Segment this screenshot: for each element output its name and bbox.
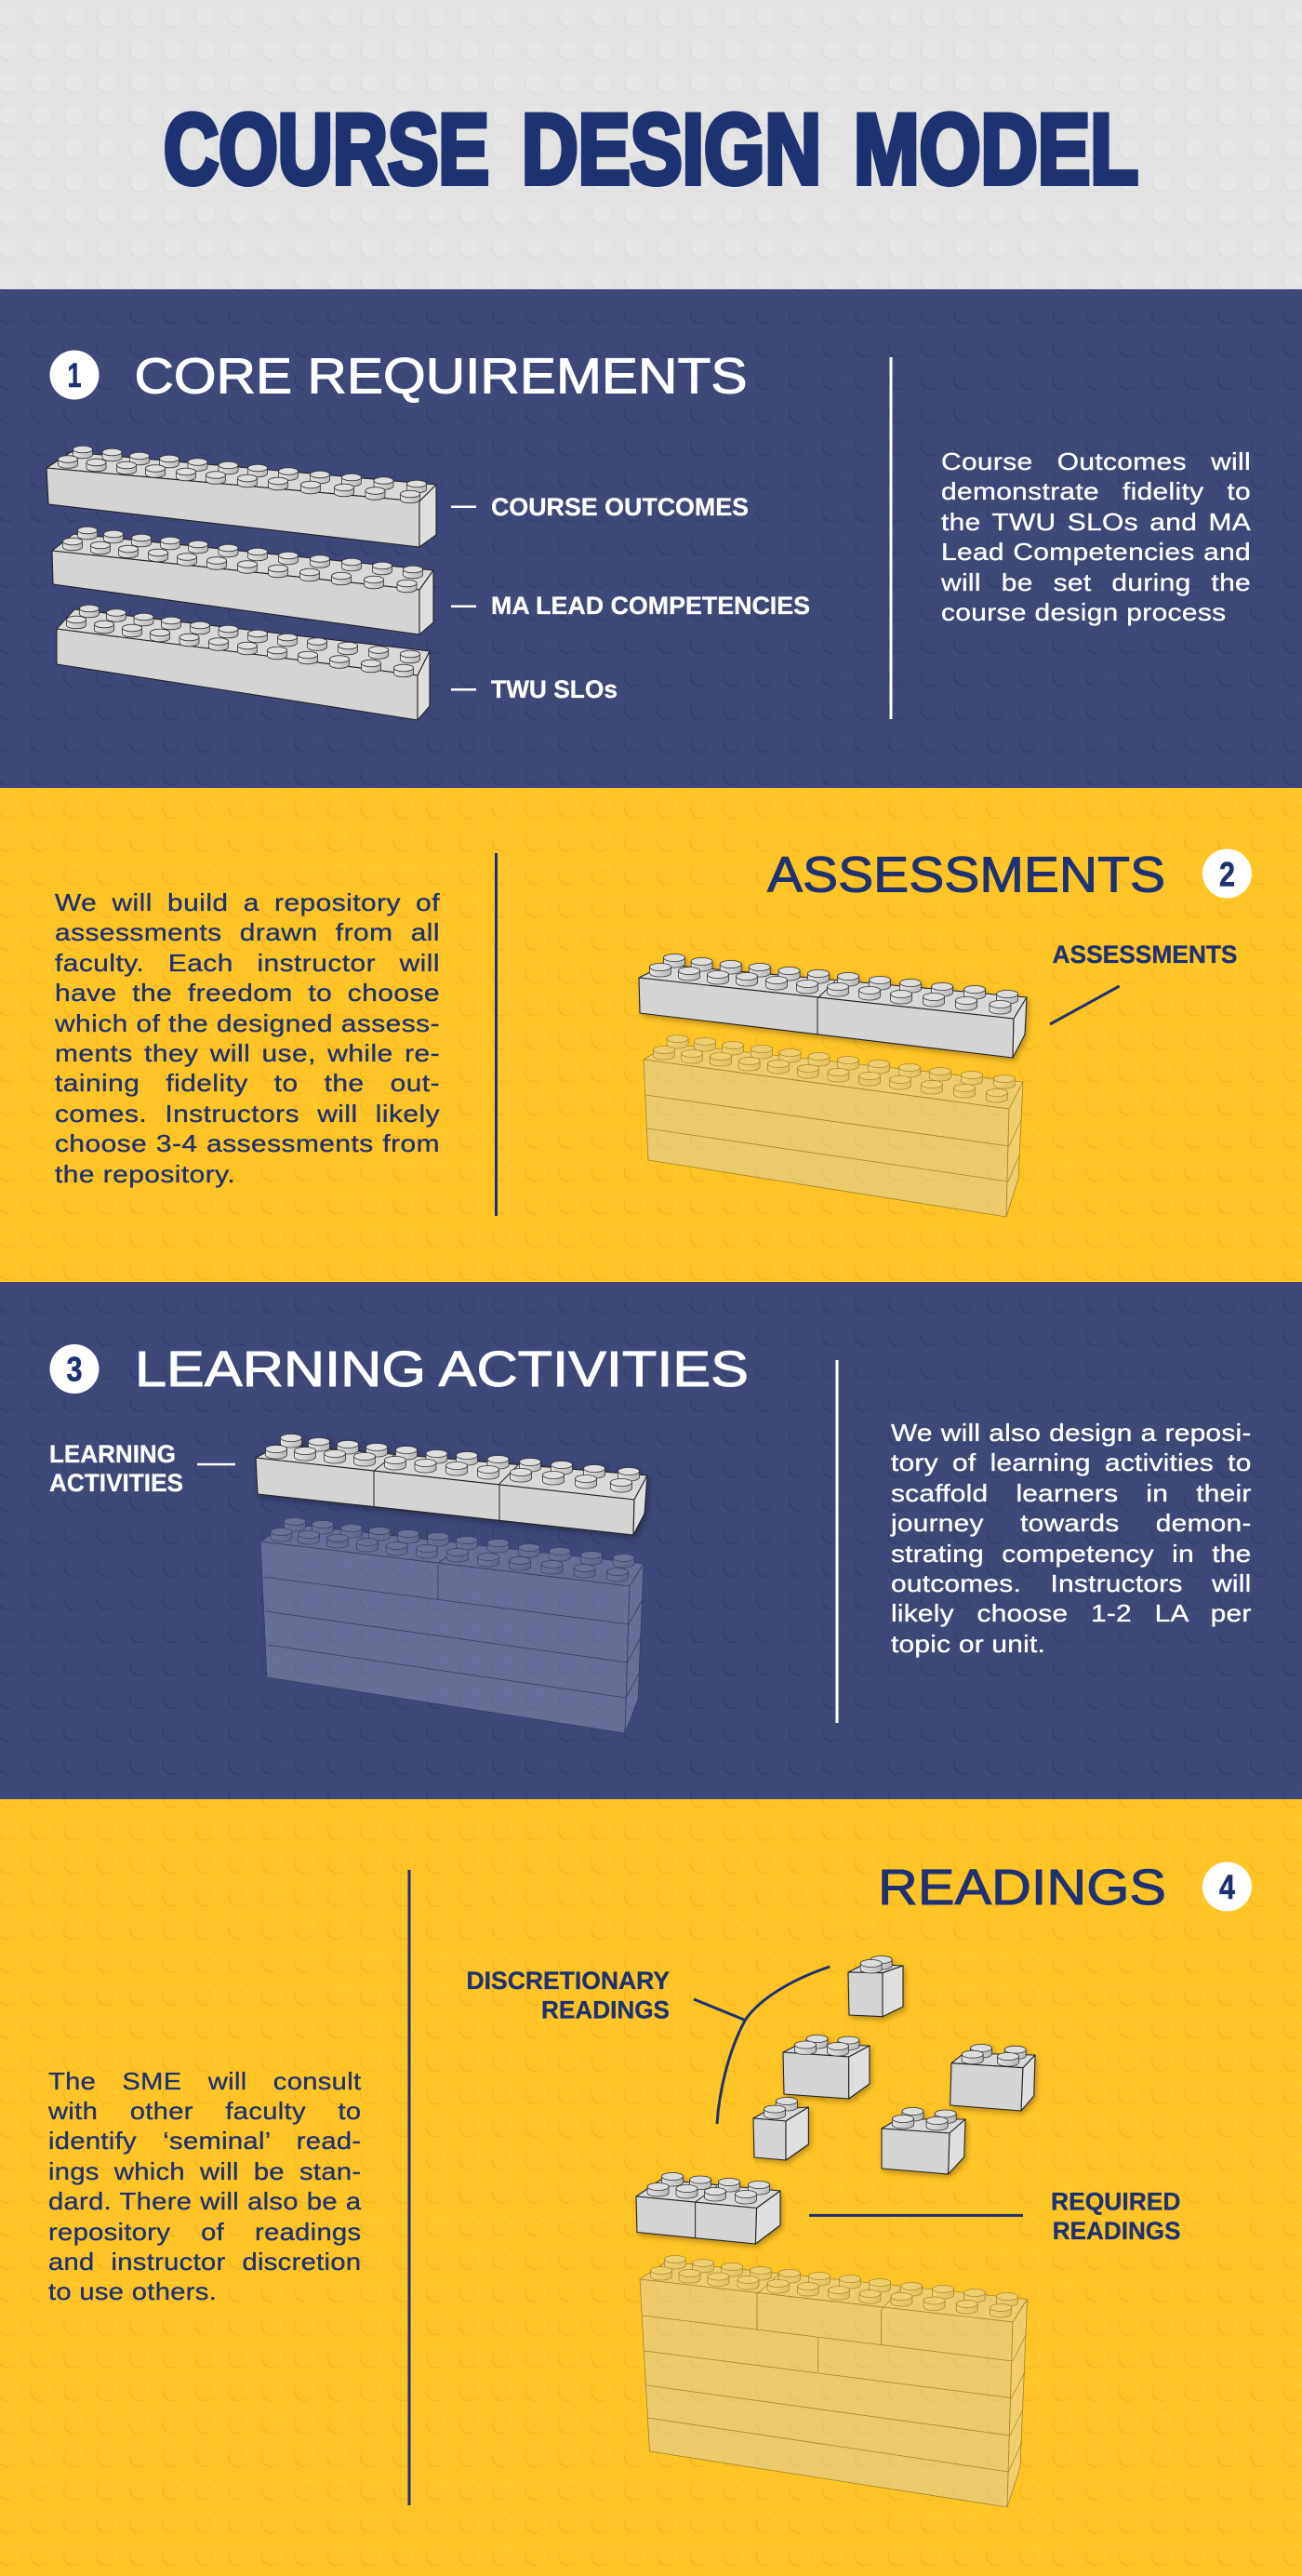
text block: assessments description: choose 3-4 assessments from — [55, 1129, 440, 1157]
ghost brick stack — [644, 1034, 1023, 1217]
text block: readings description: to use others. — [48, 2277, 217, 2305]
heading: readings: READINGS — [878, 1860, 1166, 1915]
title: MODEL — [854, 93, 1138, 205]
divider — [835, 1360, 839, 1723]
text block: assessments description: comes. Instructors will likely — [55, 1100, 440, 1128]
brick: discretionary 1 — [848, 1955, 903, 2017]
text block: assessments description: taining fidelity to the out- — [55, 1069, 440, 1097]
number badge 1: 1 — [67, 356, 82, 394]
ghost brick wall — [640, 2255, 1027, 2507]
text block: learning activities description: topic or unit. — [891, 1630, 1045, 1658]
text block: readings description — [48, 2067, 361, 2305]
text block: assessments description: faculty. Each instructor will — [55, 949, 440, 977]
panel: readings — [0, 1799, 1302, 2566]
divider — [889, 357, 893, 719]
bracket curve: discretionary readings — [717, 1967, 830, 2124]
number badge 4: 4 — [1219, 1868, 1235, 1906]
text block: learning activities description — [890, 1419, 1252, 1658]
brick: discretionary 3 — [950, 2045, 1035, 2111]
panel: title banner — [0, 0, 1302, 289]
label: learning activities: ACTIVITIES — [49, 1469, 183, 1497]
label: discretionary readings: READINGS — [541, 1996, 670, 2024]
divider — [495, 853, 498, 1216]
label: course outcomes: COURSE OUTCOMES — [491, 493, 749, 521]
label: learning activities — [49, 1440, 235, 1497]
text block: assessments description: which of the designed assess- — [55, 1009, 440, 1037]
text block: readings description: ings which will be stan- — [48, 2157, 361, 2185]
number badge 4 — [1202, 1862, 1252, 1911]
title — [164, 93, 1138, 205]
panel: learning activities — [0, 1282, 1302, 1799]
number badge 1 — [50, 350, 99, 400]
number badge 2: 2 — [1219, 856, 1235, 893]
text block: readings description: and instructor discretion — [48, 2248, 361, 2276]
brick: assessments — [639, 954, 1027, 1058]
text block: learning activities description: We will also design a reposi- — [891, 1419, 1252, 1447]
brick: discretionary 4 — [753, 2097, 808, 2160]
brick: TWU SLOs — [57, 605, 430, 720]
text block: readings description: identify ‘seminal’ read- — [48, 2127, 361, 2155]
text block: learning activities description: strating competency in the — [891, 1540, 1252, 1568]
text block: assessments description: ments they will use, while re- — [55, 1039, 440, 1067]
leader line: assessments — [1050, 986, 1120, 1024]
text block: core requirements description — [941, 447, 1251, 626]
text block: assessments description: have the freedom to choose — [55, 979, 440, 1007]
text block: readings description: The SME will consult — [48, 2067, 361, 2095]
text block: readings description: with other faculty to — [48, 2097, 361, 2125]
label: required readings: READINGS — [1053, 2217, 1181, 2245]
number badge 3: 3 — [67, 1351, 82, 1388]
leader line: discretionary readings — [694, 1999, 746, 2021]
brick: discretionary 2 — [783, 2035, 870, 2099]
text block: core requirements description: Lead Competencies and — [941, 538, 1251, 566]
text block: readings description: repository of readings — [48, 2218, 361, 2246]
heading: core requirements: CORE REQUIREMENTS — [134, 348, 748, 404]
label: TWU SLOs: TWU SLOs — [491, 675, 618, 703]
number badge 2 — [1202, 848, 1252, 899]
text block: learning activities description: outcomes. Instructors will — [891, 1569, 1252, 1597]
text block: readings description: dard. There will also be a — [48, 2187, 361, 2215]
text block: core requirements description: will be set during the — [941, 568, 1251, 596]
brick: learning activities — [256, 1435, 647, 1535]
text block: core requirements description: Course Outcomes will — [941, 447, 1251, 475]
label: required readings: REQUIRED — [1051, 2188, 1181, 2216]
panel: assessments — [0, 798, 1302, 1280]
panel: core requirements — [0, 289, 1302, 788]
brick: required readings — [636, 2173, 780, 2244]
label: discretionary readings — [467, 1967, 670, 2024]
title: DESIGN — [522, 93, 821, 205]
text block: assessments description — [54, 888, 440, 1188]
text block: assessments description: assessments drawn from all — [55, 918, 440, 946]
text block: assessments description: the repository. — [55, 1160, 235, 1188]
label: discretionary readings: DISCRETIONARY — [467, 1967, 670, 1995]
ghost brick stack — [260, 1518, 644, 1733]
heading: learning activities: LEARNING ACTIVITIES — [135, 1341, 749, 1397]
brick: discretionary 5 — [882, 2108, 965, 2174]
text block: learning activities description: journey towards demon- — [891, 1509, 1252, 1537]
divider — [407, 1870, 411, 2505]
label: assessments: ASSESSMENTS — [1053, 941, 1237, 968]
brick: MA lead competencies — [52, 527, 433, 634]
brick: course outcomes — [46, 446, 436, 547]
label: required readings — [1051, 2188, 1181, 2245]
title: COURSE — [164, 93, 489, 205]
number badge 3 — [50, 1344, 99, 1394]
text block: learning activities description: scaffold learners in their — [891, 1479, 1252, 1507]
text block: core requirements description: course design process — [941, 598, 1226, 626]
leader line: required readings — [809, 2214, 1023, 2217]
text block: core requirements description: demonstrate fidelity to — [941, 477, 1251, 505]
text block: core requirements description: the TWU SLOs and MA — [941, 508, 1251, 536]
heading: assessments: ASSESSMENTS — [767, 847, 1165, 902]
label: learning activities: LEARNING — [49, 1440, 176, 1468]
text block: learning activities description: likely choose 1-2 LA per — [891, 1599, 1252, 1627]
text block: learning activities description: tory of learning activities to — [891, 1448, 1252, 1476]
label: MA lead competencies: MA LEAD COMPETENCIES — [491, 592, 810, 620]
text block: assessments description: We will build a repository of — [55, 888, 440, 916]
